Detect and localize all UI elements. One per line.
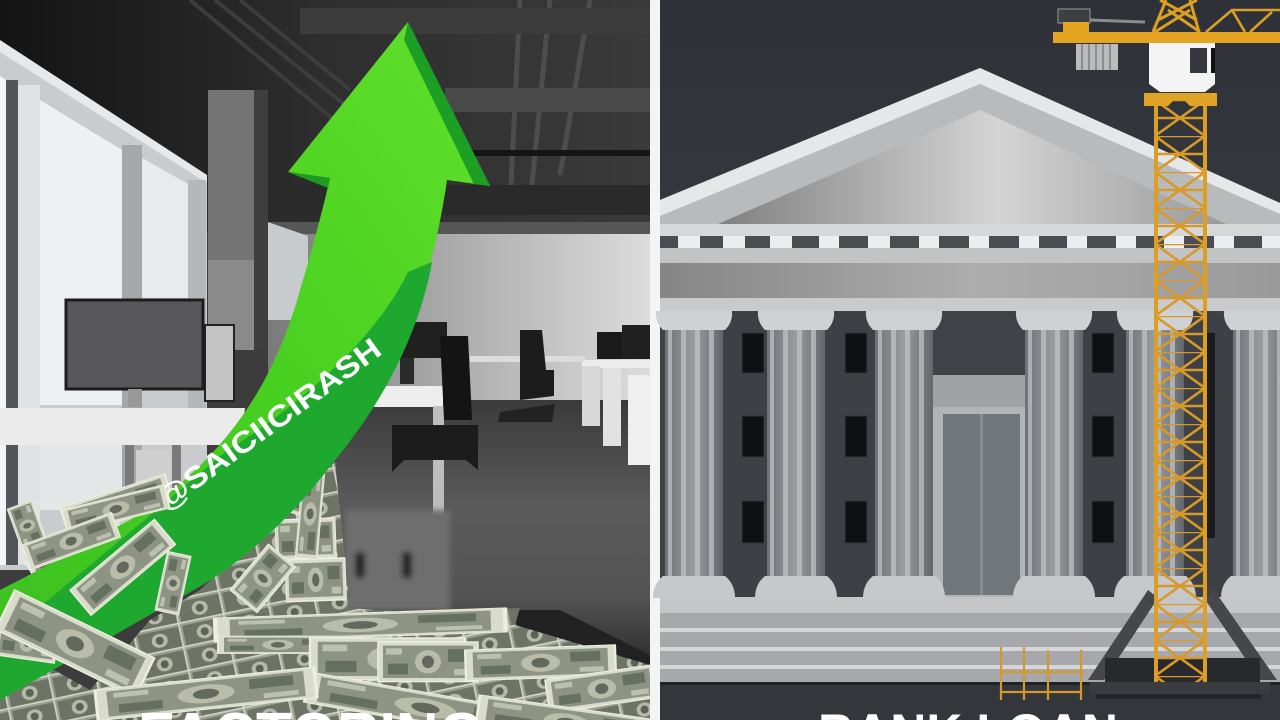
windows	[742, 333, 764, 543]
small scaffold	[1001, 647, 1084, 700]
money pile	[0, 446, 659, 720]
entablature	[660, 224, 1280, 311]
bank building wall	[660, 310, 1280, 600]
window 4	[1205, 333, 1215, 538]
money bills over arrow	[0, 485, 658, 720]
right desk and chair	[370, 322, 478, 534]
monitor and left desk	[0, 300, 245, 495]
crane jib truss	[1206, 10, 1280, 32]
dark floor edge	[510, 610, 650, 668]
ceiling	[0, 0, 650, 234]
crane tower top	[1153, 0, 1200, 32]
crane counterweight	[1076, 44, 1118, 70]
window wall	[0, 40, 207, 570]
blurred cabinet	[345, 510, 450, 610]
crane mast	[1154, 100, 1207, 682]
ground	[660, 685, 1280, 720]
panel: factoring office scene	[0, 0, 659, 720]
crane platform	[1144, 93, 1217, 106]
back office desks	[470, 325, 650, 465]
crane machinery	[1058, 9, 1145, 23]
columns	[653, 311, 1280, 598]
windows 2	[845, 333, 867, 543]
side windows	[268, 222, 308, 320]
windows 3	[1092, 333, 1114, 543]
crane cabin	[1149, 42, 1215, 92]
floor	[240, 400, 650, 660]
icon: rising green arrow	[0, 22, 490, 700]
divider	[650, 0, 660, 720]
crane jib	[1053, 22, 1280, 43]
door portal	[930, 313, 1028, 597]
steps	[660, 597, 1280, 685]
arrow label: @SAICIICIRASH	[150, 332, 388, 518]
panel: bank loan building scene	[653, 0, 1280, 720]
column	[208, 90, 254, 350]
pediment	[660, 68, 1280, 232]
crane base	[1088, 590, 1277, 699]
back wall	[268, 234, 650, 406]
